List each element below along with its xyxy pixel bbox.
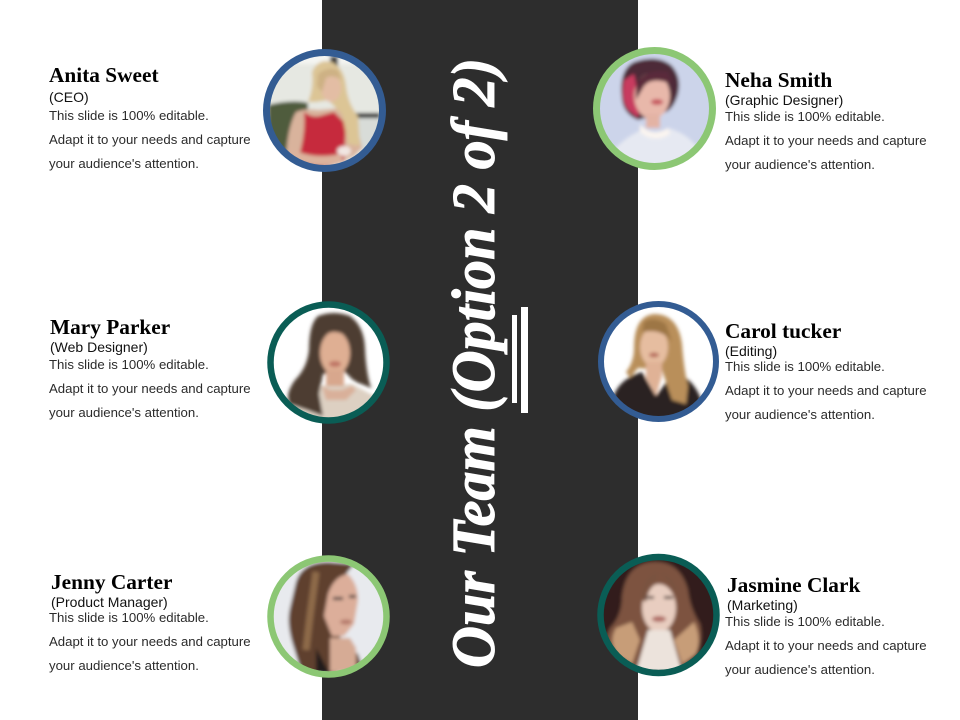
team member: Jasmine Clark: your audience's attention. <box>725 662 875 677</box>
team member: Anita Sweet: (CEO) <box>49 89 89 105</box>
team member: Neha Smith: This slide is 100% editable. <box>725 109 885 124</box>
portrait: Neha Smith <box>595 50 715 182</box>
team member: Jasmine Clark: (Marketing) <box>727 597 798 613</box>
team member: Neha Smith <box>725 68 927 172</box>
team member: Jenny Carter: Adapt it to your needs and capture <box>49 634 251 649</box>
team member: Anita Sweet <box>49 63 251 171</box>
panel: dark central band <box>322 0 638 720</box>
title: Our Team (Option 2 of 2): Our Team (Option 2 of 2) <box>441 58 508 668</box>
team member: Mary Parker: your audience's attention. <box>49 405 199 420</box>
portrait: Anita Sweet <box>265 50 385 172</box>
team member: Carol tucker: Adapt it to your needs and capture <box>725 383 927 398</box>
team member: Mary Parker: Adapt it to your needs and capture <box>49 381 251 396</box>
team member: Jasmine Clark: Jasmine Clark <box>727 573 860 597</box>
portrait: Mary Parker <box>270 304 386 428</box>
team member: Jenny Carter <box>49 570 251 673</box>
team member: Jenny Carter: This slide is 100% editable. <box>49 610 209 625</box>
team member: Jenny Carter: your audience's attention. <box>49 658 199 673</box>
portrait: Jasmine Clark <box>600 556 720 676</box>
team member: Carol tucker: your audience's attention. <box>725 407 875 422</box>
team member: Neha Smith: Neha Smith <box>725 68 832 92</box>
team member: Jasmine Clark: Adapt it to your needs and capture <box>725 638 927 653</box>
team member: Anita Sweet: This slide is 100% editable. <box>49 108 209 123</box>
team member: Jenny Carter: Jenny Carter <box>51 570 172 594</box>
team member: Jenny Carter: (Product Manager) <box>51 594 168 610</box>
team member: Neha Smith: Adapt it to your needs and capture <box>725 133 927 148</box>
team member: Mary Parker: This slide is 100% editable. <box>49 357 209 372</box>
team member: Mary Parker <box>49 315 251 420</box>
team member: Neha Smith: your audience's attention. <box>725 157 875 172</box>
team member: Anita Sweet: your audience's attention. <box>49 156 199 171</box>
team member: Mary Parker: (Web Designer) <box>50 339 148 355</box>
team member: Carol tucker <box>725 319 927 422</box>
team member: Mary Parker: Mary Parker <box>50 315 170 339</box>
portrait: Carol tucker <box>601 304 716 428</box>
team member: Carol tucker: This slide is 100% editable. <box>725 359 885 374</box>
team member: Carol tucker: (Editing) <box>725 343 777 359</box>
team member: Carol tucker: Carol tucker <box>725 319 841 343</box>
team member: Anita Sweet: Anita Sweet <box>49 63 159 87</box>
team member: Anita Sweet: Adapt it to your needs and capture <box>49 132 251 147</box>
portrait: Jenny Carter <box>270 558 390 678</box>
team member: Jasmine Clark <box>725 573 927 677</box>
portraits and title artwork <box>263 47 720 678</box>
team member: Neha Smith: (Graphic Designer) <box>725 92 843 108</box>
team member: Jasmine Clark: This slide is 100% editable. <box>725 614 885 629</box>
